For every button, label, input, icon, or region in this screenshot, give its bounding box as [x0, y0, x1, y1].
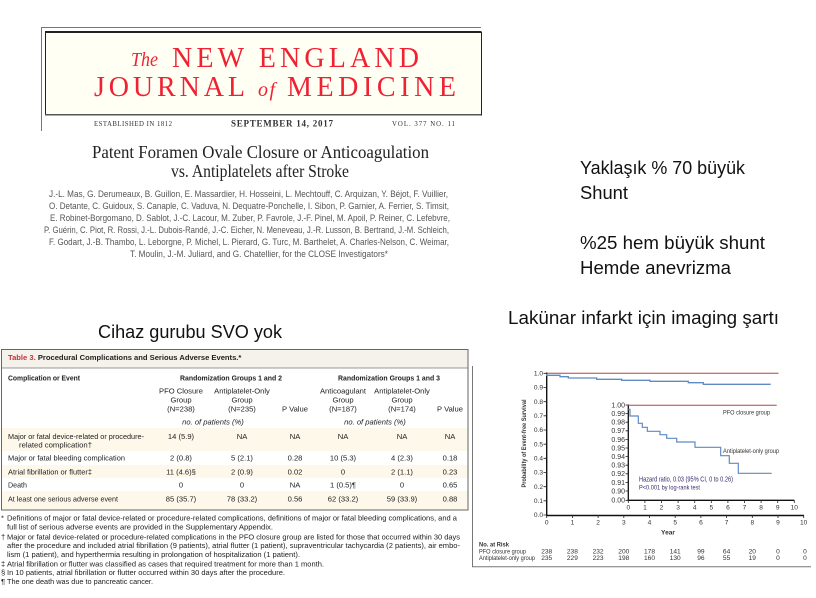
- inset chart: 7: [743, 505, 747, 512]
- text block: shunt notes: %25 hem büyük shunt: [580, 233, 765, 253]
- numbers at risk table: No. at Risk: [479, 542, 509, 548]
- table values: 0: [400, 480, 404, 490]
- numbers at risk table: 238: [541, 548, 553, 556]
- table column headers: no. of patients (%): [344, 418, 406, 426]
- numbers at risk table: 0: [803, 548, 807, 556]
- main axes: 0.0: [534, 512, 543, 519]
- journal name: The: [131, 49, 158, 71]
- masthead date line: [94, 118, 455, 128]
- main axes: 10: [800, 520, 808, 526]
- table footnotes: *: [1, 514, 4, 522]
- table row labels: Major or fatal device-related or procedure-: [8, 432, 144, 441]
- article title: Patent Foramen Ovale Closure or Anticoagulation: [92, 142, 429, 162]
- table footnotes: Atrial fibrillation or flutter was classified as cases that required treatment for more than 1 month.: [7, 560, 324, 568]
- table row labels: Major or fatal bleeding complication: [8, 454, 125, 462]
- table column headers: P Value: [282, 404, 308, 414]
- numbers at risk table: 200: [618, 548, 630, 556]
- main axes: 0.7: [534, 413, 543, 420]
- main axes: 4: [648, 520, 652, 526]
- inset chart: 1: [643, 505, 647, 512]
- main axes: 7: [725, 520, 729, 526]
- inset chart: 0.92: [611, 471, 625, 478]
- author list: O. Detante, C. Guidoux, S. Canaple, C. Vaduva, N. Dequatre-Ponchelle, I. Sibon, P. Garnier, A. Ferrier, S. Timsit,: [49, 201, 449, 212]
- table values: 62 (33.2): [328, 494, 359, 504]
- main curve: antiplatelet-only group: [547, 374, 771, 384]
- panel: Kaplan-Meier chart: [472, 366, 811, 567]
- main axes: 0: [545, 520, 549, 526]
- journal name: JOURNAL: [94, 72, 245, 103]
- numbers at risk table: 96: [697, 555, 705, 562]
- table footnotes: Definitions of major or fatal device-related or procedure-related complications, definitions of major or fatal bleeding complications, and a: [7, 514, 458, 522]
- table title: Table 3. Procedural Complications and Serious Adverse Events.*: [8, 353, 241, 362]
- table values: 0.65: [443, 480, 457, 490]
- table values: 4 (2.3): [391, 454, 413, 462]
- table column headers: Anticoagulant: [320, 386, 367, 396]
- table footnotes: §: [1, 568, 5, 577]
- main axes: 9: [776, 520, 780, 526]
- inset curve: antiplatelet-only group: [628, 409, 772, 473]
- table footnotes: In 10 patients, atrial fibrillation or flutter occurred within 30 days after the procedure.: [7, 568, 285, 577]
- panel: table 3: [2, 350, 468, 510]
- table footnotes: ¶: [1, 577, 5, 586]
- inset label: antiplatelet-only group: Antiplatelet-only group: [723, 448, 779, 455]
- inset chart: 0: [626, 505, 630, 512]
- table column headers: (N=238): [167, 404, 195, 414]
- numbers at risk table: PFO closure group: [479, 548, 526, 556]
- table footnotes: ‡: [1, 560, 5, 568]
- main curve: PFO closure group: [547, 372, 778, 374]
- main axes: 0.4: [534, 456, 543, 462]
- numbers at risk table: 229: [567, 555, 578, 562]
- table values: NA: [290, 480, 301, 490]
- table values: NA: [290, 432, 301, 441]
- inset chart: 2: [660, 505, 664, 512]
- table row labels: At least one serious adverse event: [8, 494, 119, 504]
- table values: 59 (33.9): [387, 494, 418, 504]
- table column headers: [8, 374, 463, 426]
- inset chart: 3: [676, 505, 680, 512]
- table column headers: Antiplatelet-Only: [374, 386, 430, 396]
- table values: 2 (1.1): [391, 468, 413, 476]
- text block: shunt notes: Shunt: [580, 183, 628, 203]
- main axes: 8: [750, 520, 754, 526]
- table footnotes: [1, 514, 460, 586]
- table column headers: Group: [391, 396, 413, 404]
- masthead date line: VOL. 377 NO. 11: [392, 121, 455, 128]
- author list: E. Robinet-Borgomano, D. Sablot, J.-C. Lacour, M. Zuber, P. Favrole, J.-F. Pinel, M. Apoil, P. Reiner, C. Lefebvre,: [50, 213, 450, 224]
- numbers at risk table: 64: [723, 548, 731, 556]
- table values: 0.18: [443, 454, 457, 462]
- numbers at risk table: 238: [567, 548, 578, 556]
- table footnotes: Major or fatal device-related or procedure-related complications in the PFO closure group are listed for those that occurred within 30 days: [7, 532, 460, 542]
- numbers at risk table: 223: [593, 555, 604, 562]
- numbers at risk table: Antiplatelet-only group: [479, 555, 535, 562]
- numbers at risk table: 0: [776, 548, 780, 556]
- text block: shunt notes: Yaklaşık % 70 büyük: [580, 158, 746, 178]
- table footnotes: after the procedure and included atrial fibrillation (9 patients), atrial flutter (1 patient), supraventricular tachycardia (2 patients), air embo-: [7, 541, 460, 550]
- main axes: 0.5: [534, 441, 543, 448]
- numbers at risk table: 130: [670, 555, 681, 562]
- journal name: NEW ENGLAND: [172, 43, 419, 74]
- table values: 10 (5.3): [330, 454, 357, 462]
- table column headers: Group: [332, 396, 354, 404]
- table values: 0: [240, 480, 244, 490]
- table column headers: Group: [170, 396, 192, 404]
- numbers at risk table: 232: [593, 548, 604, 556]
- table values: 78 (33.2): [227, 494, 258, 504]
- panel: journal masthead: [42, 28, 482, 131]
- table column headers: PFO Closure: [159, 386, 203, 396]
- table values: 0.28: [288, 454, 302, 462]
- table values: 0: [179, 480, 183, 490]
- inset chart: 0.98: [611, 420, 625, 427]
- article title: [92, 142, 429, 181]
- inset chart: 0.96: [611, 437, 625, 444]
- numbers at risk table: 19: [749, 555, 756, 562]
- main axes: 0.9: [534, 385, 543, 392]
- hazard ratio note: Hazard ratio, 0.03 (95% CI, 0 to 0.26): [639, 476, 733, 484]
- table column headers: no. of patients (%): [182, 418, 244, 426]
- table values: 2 (0.8): [170, 454, 192, 462]
- hazard ratio note: P<0.001 by log-rank test: [639, 484, 700, 492]
- table values: 14 (5.9): [168, 432, 195, 441]
- inset chart: 4: [693, 505, 697, 512]
- table column headers: (N=235): [228, 404, 256, 414]
- table column headers: Group: [231, 396, 253, 404]
- inset chart: 0.91: [611, 480, 625, 487]
- table values: 0: [341, 468, 345, 476]
- inset chart: 8: [759, 505, 763, 512]
- inset chart: 1.00: [611, 402, 625, 410]
- text block: shunt notes: Hemde anevrizma: [580, 258, 732, 278]
- numbers at risk table: 198: [618, 555, 630, 562]
- table values: NA: [445, 432, 456, 441]
- inset chart: 0.99: [611, 411, 625, 418]
- numbers at risk table: 235: [541, 555, 553, 562]
- text: lacunar infarct note: Lakünar infarkt için imaging şartı: [508, 308, 779, 328]
- main axes: 0.6: [534, 427, 543, 434]
- table column headers: Complication or Event: [8, 374, 80, 382]
- inset curve: PFO closure group: [628, 404, 777, 406]
- table row labels: Atrial fibrillation or flutter‡: [8, 468, 92, 476]
- journal name: MEDICINE: [287, 72, 456, 103]
- author list: T. Moulin, J.-M. Juliard, and G. Chatellier, for the CLOSE Investigators*: [130, 249, 388, 260]
- table row labels: [8, 432, 144, 504]
- numbers at risk table: 160: [644, 555, 655, 562]
- author list: P. Guérin, C. Piot, R. Rossi, J.-L. Dubois-Randé, J.-C. Eicher, N. Meneveau, J.-R. Lusson, B. Bertrand, J.-M. Schleich,: [44, 225, 449, 236]
- numbers at risk table: 178: [644, 548, 655, 556]
- table values: NA: [338, 432, 349, 441]
- inset chart: 5: [709, 505, 713, 512]
- inset chart: 10: [791, 505, 798, 512]
- numbers at risk table: 0: [803, 555, 807, 562]
- table values: 85 (35.7): [166, 494, 197, 504]
- numbers at risk table: 20: [749, 548, 756, 556]
- inset chart: 0.94: [611, 454, 625, 461]
- table footnotes: lism (1 patient), and hyperthermia resulting in prolongation of hospitalization (1 patient).: [7, 550, 300, 559]
- text block: shunt notes: [580, 158, 765, 278]
- author list: [44, 189, 450, 260]
- table values: 1 (0.5)¶: [330, 480, 356, 490]
- y axis title: Probability of Event-free Survival: [521, 399, 528, 488]
- table row labels: related complication†: [19, 440, 92, 450]
- masthead date line: SEPTEMBER 14, 2017: [231, 118, 334, 128]
- main axes: Year: [661, 530, 675, 536]
- inset chart: 6: [726, 505, 730, 512]
- table row labels: Death: [8, 480, 27, 490]
- table column headers: Antiplatelet-Only: [214, 386, 270, 396]
- table values: [166, 432, 457, 504]
- hazard ratio note: [639, 476, 733, 492]
- inset chart: 0.95: [611, 445, 625, 452]
- numbers at risk table: [479, 542, 807, 562]
- main axes: 6: [699, 520, 703, 526]
- table column headers: Randomization Groups 1 and 3: [338, 374, 440, 382]
- masthead date line: ESTABLISHED IN 1812: [94, 121, 173, 128]
- main axes: 5: [673, 520, 677, 526]
- main axes: 0.1: [534, 498, 543, 505]
- table values: 5 (2.1): [231, 454, 253, 462]
- main axes: [534, 370, 808, 536]
- table values: NA: [397, 432, 408, 441]
- table values: NA: [237, 432, 248, 441]
- table footnotes: †: [1, 532, 5, 542]
- table column headers: (N=174): [388, 404, 416, 414]
- numbers at risk table: 141: [670, 548, 681, 556]
- journal name: of: [258, 79, 277, 101]
- inset chart: 0.93: [611, 463, 625, 470]
- table footnotes: full list of serious adverse events are provided in the Supplementary Appendix.: [7, 522, 273, 532]
- main axes: 0.3: [534, 470, 543, 477]
- table values: 0.02: [288, 468, 302, 476]
- main axes: 2: [596, 520, 600, 526]
- inset chart: [611, 402, 798, 512]
- table values: 0.88: [443, 494, 457, 504]
- table values: 11 (4.6)§: [166, 468, 196, 476]
- inset chart: 0.97: [611, 428, 625, 435]
- numbers at risk table: 99: [697, 548, 705, 556]
- table values: 0.56: [288, 494, 302, 504]
- table column headers: (N=187): [329, 404, 357, 414]
- table values: 0.23: [443, 468, 457, 476]
- text: device group note: Cihaz gurubu SVO yok: [98, 322, 283, 342]
- author list: F. Godart, J.-B. Thambo, L. Leborgne, P. Michel, L. Pierard, G. Turc, M. Barthelet, A. Charles-Nelson, C. Weimar,: [49, 237, 449, 248]
- table values: 2 (0.9): [231, 468, 253, 476]
- journal name: [94, 43, 456, 103]
- main axes: 1: [571, 520, 575, 526]
- numbers at risk table: 55: [723, 555, 731, 562]
- inset chart: 0.00: [611, 498, 625, 505]
- table column headers: Randomization Groups 1 and 2: [180, 374, 282, 382]
- inset chart: 9: [776, 505, 780, 512]
- table footnotes: The one death was due to pancreatic cancer.: [7, 577, 153, 586]
- main axes: 0.2: [534, 484, 543, 491]
- article title: vs. Antiplatelets after Stroke: [171, 161, 349, 181]
- numbers at risk table: 0: [776, 555, 780, 562]
- main axes: 3: [622, 520, 626, 526]
- table column headers: P Value: [437, 404, 463, 414]
- inset chart: 0.90: [611, 488, 625, 495]
- main axes: 0.8: [534, 399, 543, 406]
- inset label: PFO closure group: PFO closure group: [723, 409, 770, 416]
- author list: J.-L. Mas, G. Derumeaux, B. Guillon, E. Massardier, H. Hosseini, L. Mechtouff, C. Arquizan, Y. Béjot, F. Vuillier,: [49, 189, 448, 200]
- main axes: 1.0: [534, 370, 543, 378]
